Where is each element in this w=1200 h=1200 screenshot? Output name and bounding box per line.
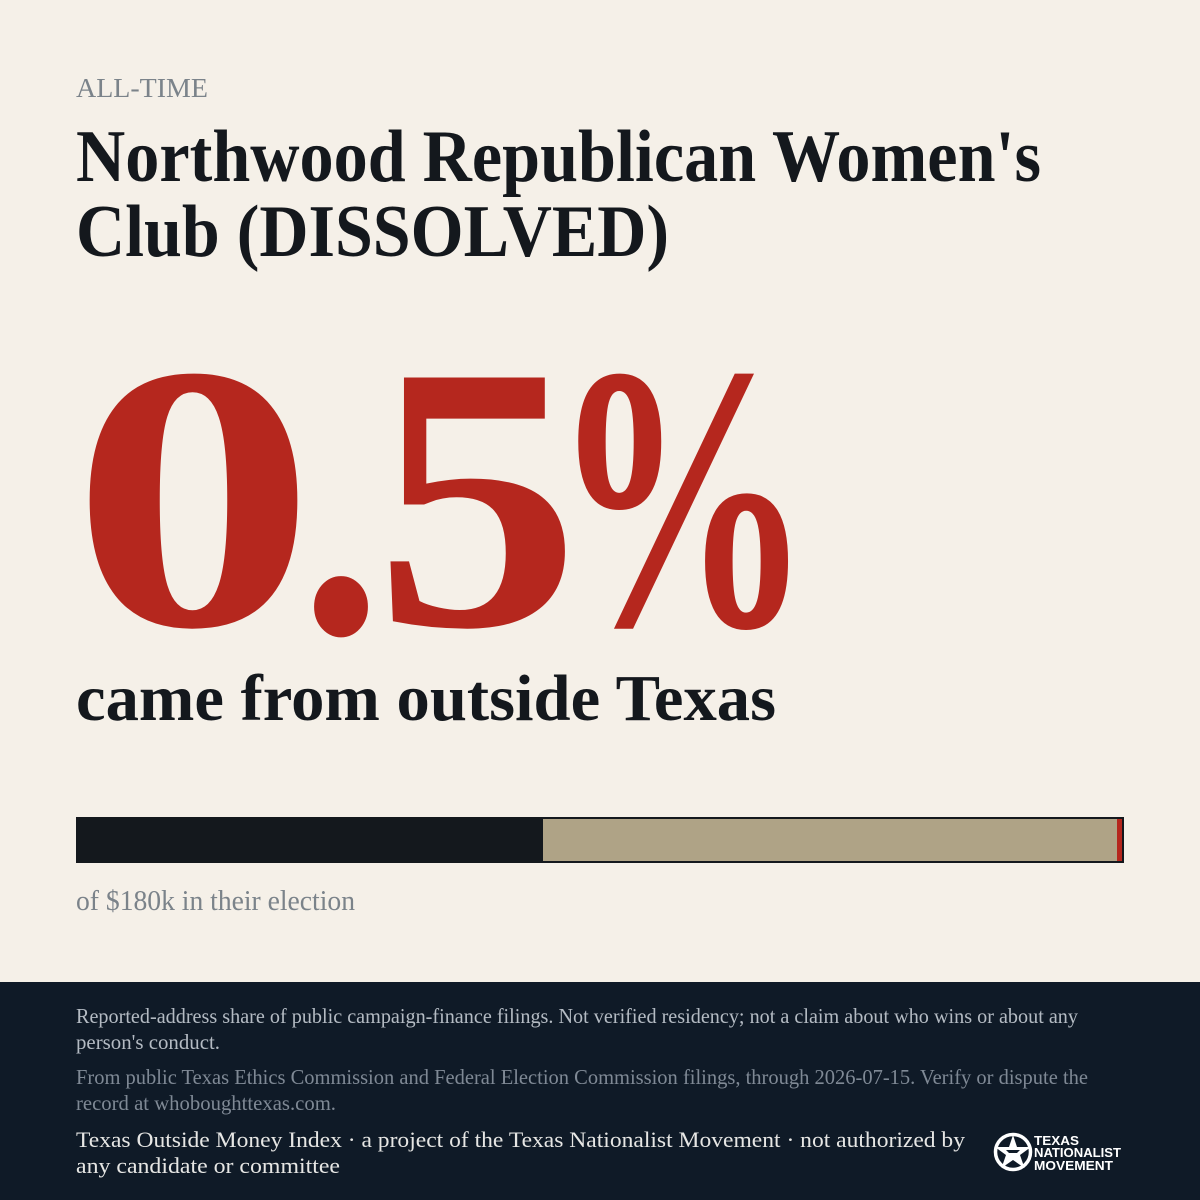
title: Club (DISSOLVED) — [76, 191, 669, 273]
logo wordmark: MOVEMENT — [1034, 1158, 1113, 1173]
big statistic: 0.5%: . — [300, 295, 382, 714]
big statistic: 0.5%: % — [552, 288, 812, 707]
attribution: any candidate or committee — [76, 1153, 340, 1178]
big statistic: 0.5%: 5 — [374, 288, 580, 707]
source note: From public Texas Ethics Commission and Federal Election Commission filings, through 2026-07-15. Verify or dispute the — [76, 1065, 1088, 1089]
statistic caption: came from outside Texas — [76, 662, 776, 735]
eyebrow label: ALL-TIME — [76, 73, 208, 103]
icon: star in circle — [995, 1134, 1031, 1170]
stacked bar — [76, 817, 1124, 863]
logo wordmark: NATIONALIST — [1034, 1145, 1121, 1160]
methodology note: person's conduct. — [76, 1030, 220, 1054]
attribution: Texas Outside Money Index · a project of the Texas Nationalist Movement · not authorized by — [76, 1127, 966, 1152]
logo wordmark: TEXAS — [1034, 1133, 1079, 1148]
methodology note: Reported-address share of public campaign-finance filings. Not verified residency; not a claim about who wins or about any — [76, 1004, 1078, 1028]
logo: Texas Nationalist Movement — [995, 1133, 1121, 1173]
big statistic: 0.5% — [71, 288, 812, 714]
title — [76, 116, 1041, 273]
title: Northwood Republican Women's — [76, 116, 1041, 198]
logo wordmark — [1034, 1133, 1121, 1173]
big statistic: 0.5%: 0 — [71, 288, 316, 707]
bar segment: Texas other share — [543, 819, 1117, 861]
footer panel — [0, 982, 1200, 1200]
source note — [76, 1065, 1088, 1115]
bar segment: outside Texas — [1117, 819, 1122, 861]
bar caption: of $180k in their election — [76, 886, 355, 917]
methodology note — [76, 1004, 1078, 1054]
attribution — [76, 1127, 966, 1178]
source note: record at whoboughttexas.com. — [76, 1091, 336, 1115]
